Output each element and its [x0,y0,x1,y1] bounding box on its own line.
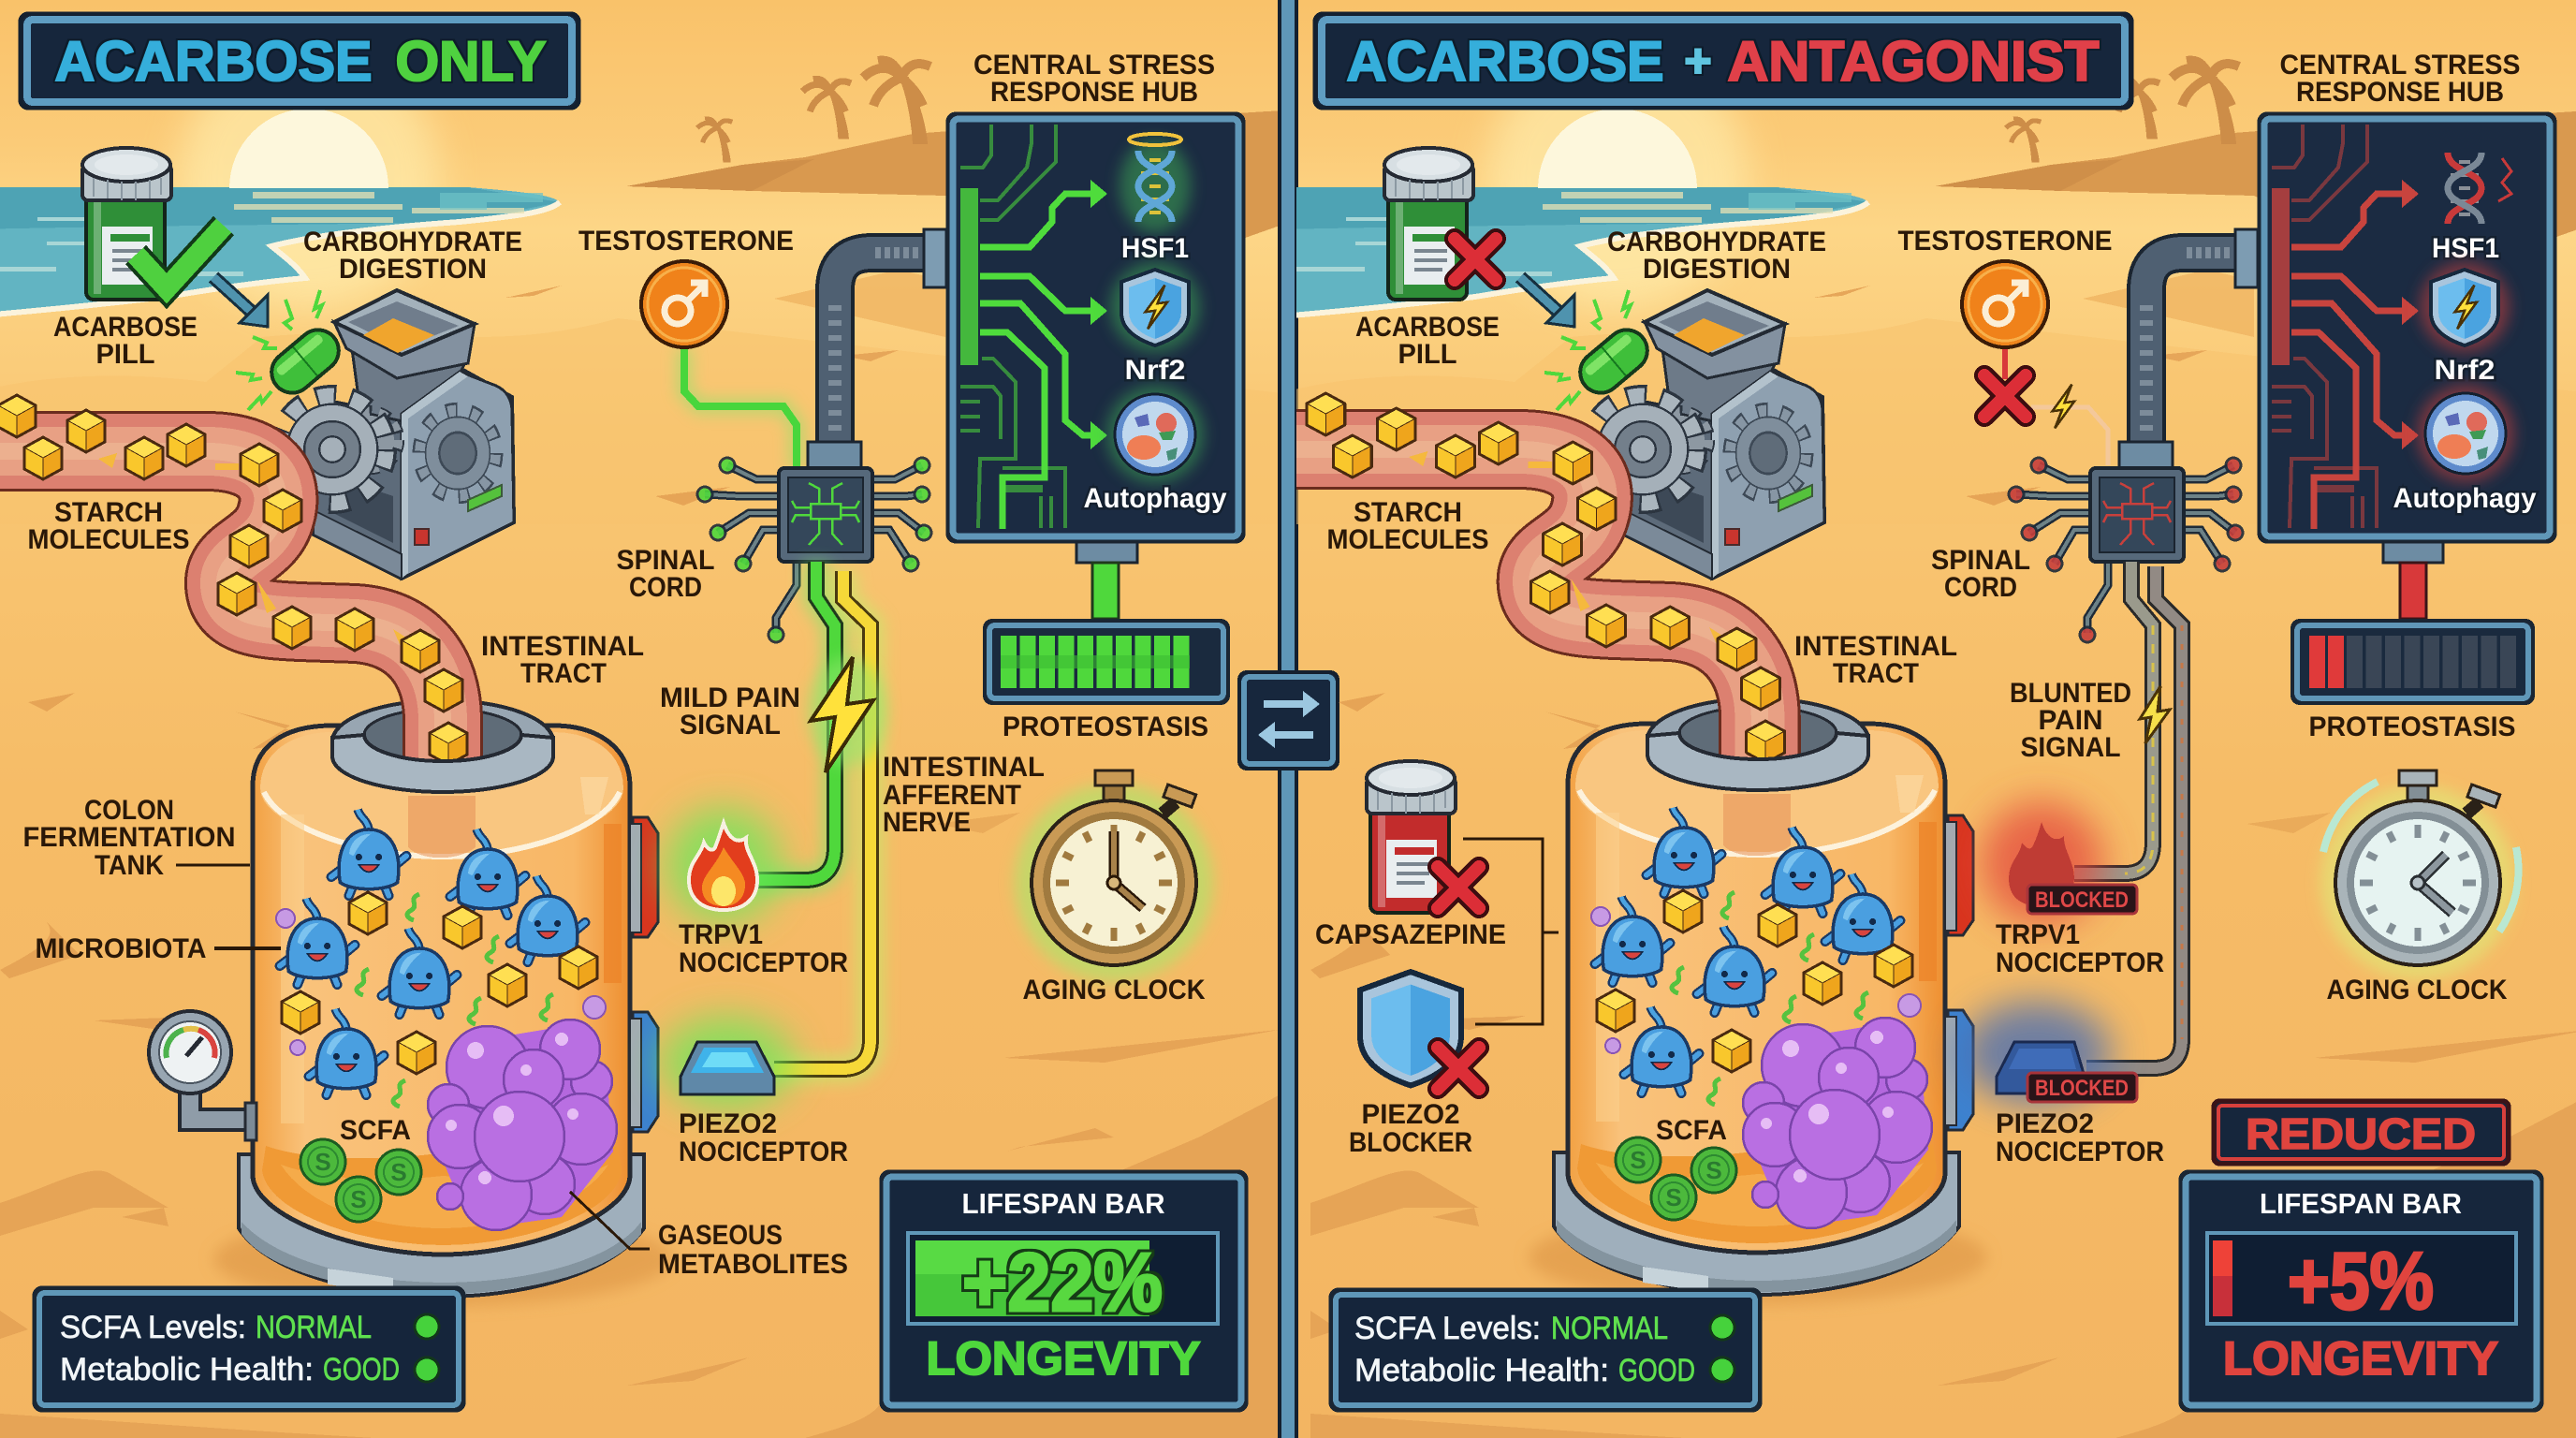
lifespan bar panel: +5% [2288,1237,2434,1327]
label: aging clock: AGING CLOCK [1022,975,1206,1005]
intestinal tract with starch cubes [0,395,467,765]
label: colon fermentation tank: TANK [95,850,164,881]
colon fermentation tank [213,700,672,1306]
status box: Metabolic Health: [1354,1353,1609,1388]
label: spinal cord: SPINAL [616,545,715,576]
label: starch molecules: MOLECULES [28,524,189,555]
lifespan bar panel: LONGEVITY [927,1332,1200,1385]
label: TRPV1 nociceptor: NOCICEPTOR [1996,947,2164,978]
label: aging clock: AGING CLOCK [2327,975,2508,1005]
panel: central stress response hub [948,114,1243,541]
aging clock [1015,770,1213,982]
label: TRPV1 nociceptor: NOCICEPTOR [679,947,848,978]
label: acarbose pill: ACARBOSE [1355,312,1500,343]
label: acarbose pill: PILL [1398,339,1456,370]
icon: testosterone coin [641,261,727,347]
label: HSF1: HSF1 [1121,233,1189,264]
label: testosterone: TESTOSTERONE [578,226,794,257]
label: intestinal tract [481,631,644,689]
label: intestinal tract: INTESTINAL [1794,631,1957,662]
label: gaseous metabolites [570,1192,848,1280]
label: Nrf2: Nrf2 [1125,355,1185,386]
label: acarbose pill [53,312,198,370]
label: autophagy: Autophagy [2393,483,2537,514]
intestinal tract with starch cubes [1280,393,1784,763]
label: spinal cord [616,545,715,603]
label: spinal cord [1931,545,2030,603]
label: blunted pain signal [2010,678,2131,763]
label: starch molecules: STARCH [1354,497,1462,528]
icon: testosterone coin [1962,261,2048,347]
tank ring front [332,735,553,792]
beach scene with sun, sea and palms [0,47,1282,1438]
label: HSF1: HSF1 [2432,233,2499,264]
label: piezo2 blocker: BLOCKER [1349,1127,1472,1158]
label: acarbose pill [1355,312,1500,370]
label: starch molecules [1327,497,1488,555]
SCFA coin letters: S [315,1148,331,1176]
spinal cord chip [697,442,931,642]
SCFA coin letters [1630,1146,1722,1211]
label: proteostasis: PROTEOSTASIS [2308,712,2516,742]
blunted nerve lines [2074,562,2182,1068]
icon: Nrf2 shield [2420,262,2510,352]
acarbose pill bottle with check mark [82,148,224,300]
icon: HSF1 dna damaged [2448,153,2511,224]
colon fermentation tank [1529,698,1987,1304]
icon: blocked PIEZO2 plate [1961,1002,2111,1105]
label: TRPV1 nociceptor: TRPV1 [1996,919,2080,950]
label: central stress response hub [973,50,1215,108]
title banner [1315,14,2131,108]
green connector to proteostasis [1076,542,1137,619]
icon: TRPV1 flame [666,807,782,923]
label: autophagy: Autophagy [1084,483,1227,514]
hub circuitry [960,125,1107,529]
arrow: pill to digestion [213,277,268,327]
lifespan bar panel: LONGEVITY [2223,1332,2498,1385]
SCFA coin letters [315,1148,407,1213]
aging clock [2320,770,2519,980]
label: intestinal afferent nerve: AFFERENT [883,780,1021,811]
label: piezo2 blocker: PIEZO2 [1361,1099,1460,1130]
icon: blocked testosterone line [1984,348,2108,465]
label: carbohydrate digestion: DIGESTION [339,254,487,285]
swap arrows badge [1239,672,1338,769]
label: intestinal tract: TRACT [520,658,607,689]
title banner: ACARBOSE [1346,30,1664,93]
status box [1331,1290,1760,1410]
label: PIEZO2 nociceptor: NOCICEPTOR [679,1137,848,1167]
status box: SCFA Levels: [1354,1311,1541,1346]
label: acarbose pill: ACARBOSE [53,312,198,343]
label: PIEZO2 nociceptor: PIEZO2 [1996,1108,2094,1139]
SCFA coin letters: S [1665,1183,1682,1211]
label: central stress response hub [2280,50,2520,108]
SCFA coin letters: S [1630,1146,1647,1174]
label: PIEZO2 nociceptor: NOCICEPTOR [1996,1137,2164,1167]
center divider [1278,0,1298,1438]
proteostasis gauge [985,621,1228,703]
icon: autophagy cell [1106,386,1204,483]
SCFA coin letters: S [350,1185,367,1213]
status box: SCFA Levels: [60,1310,246,1345]
capsazepine bottle with red X [1367,761,1479,913]
panel: central stress response hub [2260,114,2554,541]
label: carbohydrate digestion [303,227,522,285]
label: central stress response hub: CENTRAL STRESS [2280,50,2520,81]
icon: PIEZO2 plate [660,1016,795,1109]
spinal cord chip [2009,442,2243,642]
acarbose pill bottle with red X [1384,148,1496,300]
icon: small lightning bolt [2140,686,2170,743]
SCFA coin letters: S [390,1158,407,1186]
label: TRPV1 nociceptor [679,919,848,978]
green capsule with sparks [1544,290,1656,410]
icon: Nrf2 shield [1110,262,1200,352]
label: spinal cord: CORD [629,572,702,603]
icon: blocked TRPV1 flame [1980,801,2103,925]
label: acarbose pill: PILL [95,339,155,370]
label: PIEZO2 nociceptor: PIEZO2 [679,1108,777,1139]
label: starch molecules: STARCH [54,497,163,528]
label: central stress response hub: RESPONSE HUB [2296,77,2504,108]
icon: autophagy cell [2417,385,2514,482]
status box: NORMAL [256,1310,372,1345]
hub circuitry [2272,125,2419,529]
label: starch molecules [28,497,189,555]
red connector to proteostasis [2383,542,2443,619]
status box: GOOD [323,1352,400,1387]
label: intestinal afferent nerve: INTESTINAL [883,752,1045,783]
label: carbohydrate digestion: CARBOHYDRATE [1607,227,1826,257]
label: blunted pain signal: SIGNAL [2020,732,2121,763]
tank ring front [1647,733,1868,790]
stress hub pipe [2146,229,2258,445]
label: Nrf2: Nrf2 [2434,355,2496,386]
label: mild pain signal: SIGNAL [680,710,781,741]
status box [35,1288,463,1410]
label: SCFA: SCFA [1656,1115,1727,1146]
arrow: pill to digestion [1520,277,1574,327]
label: carbohydrate digestion: DIGESTION [1643,254,1791,285]
lifespan bar panel: LIFESPAN BAR [962,1187,1164,1220]
title banner: + [1684,35,1712,87]
label: spinal cord: CORD [1944,572,2017,603]
label: blunted pain signal: PAIN [2039,705,2102,736]
lifespan bar panel: +22% [962,1236,1163,1328]
label: carbohydrate digestion: CARBOHYDRATE [303,227,522,257]
lifespan bar panel [882,1172,1246,1410]
label: gaseous metabolites: METABOLITES [658,1249,848,1280]
panel: acarbose plus antagonist [1280,14,2576,1438]
label: piezo2 blocker [1349,1099,1472,1158]
label: colon fermentation tank: COLON [84,795,174,826]
label: spinal cord: SPINAL [1931,545,2030,576]
beach scene with sun, sea and palms [1281,47,2576,1438]
lifespan bar panel [2181,1172,2541,1410]
label: SCFA: SCFA [340,1115,411,1146]
label: proteostasis: PROTEOSTASIS [1003,712,1208,742]
icon: HSF1 dna [1120,134,1191,233]
afferent nerve lines [757,562,871,1069]
label: capsazepine: CAPSAZEPINE [1315,919,1506,950]
lifespan bar panel: LIFESPAN BAR [2260,1187,2462,1220]
label: intestinal afferent nerve [883,752,1045,838]
title banner: ANTAGONIST [1728,30,2099,93]
green capsule with sparks [236,290,347,410]
grinder machine [1591,290,1824,579]
label: central stress response hub: CENTRAL STRESS [973,50,1215,81]
label: colon fermentation tank [22,795,250,881]
green testosterone nerve line [684,348,797,468]
label: intestinal tract [1794,631,1957,689]
label: colon fermentation tank: FERMENTATION [22,822,236,853]
label: blunted pain signal: BLUNTED [2010,678,2131,709]
label: microbiota: MICROBIOTA [36,933,206,964]
blocked badge: BLOCKED [2035,1076,2129,1101]
pressure gauge [149,1011,256,1140]
label: gaseous metabolites: GASEOUS [658,1220,783,1251]
proteostasis gauge [2292,621,2533,703]
status box: Metabolic Health: [60,1352,314,1387]
blocked badge: BLOCKED [2035,888,2129,913]
title banner: ACARBOSE [54,30,373,93]
label: PIEZO2 nociceptor [1996,1108,2164,1167]
title banner: ONLY [395,30,547,93]
label: intestinal tract: TRACT [1833,658,1919,689]
label: starch molecules: MOLECULES [1327,524,1488,555]
status box: GOOD [1618,1353,1695,1388]
icon: lightning bolt [808,657,886,772]
reduced badge: REDUCED [2246,1109,2476,1158]
SCFA coin letters: S [1705,1156,1722,1184]
bracket from blockers to tank [1463,839,1559,1024]
reduced badge [2214,1101,2509,1164]
title banner [21,14,578,108]
stress hub pipe [835,229,946,445]
label: mild pain signal: MILD PAIN [660,682,800,713]
panel: acarbose only [0,14,1282,1438]
status box: NORMAL [1551,1311,1668,1346]
label: central stress response hub: RESPONSE HUB [990,77,1198,108]
label: TRPV1 nociceptor [1996,919,2164,978]
label: PIEZO2 nociceptor [679,1108,848,1167]
label: TRPV1 nociceptor: TRPV1 [679,919,763,950]
label: testosterone: TESTOSTERONE [1898,226,2112,257]
piezo2 blocker shield with red X [1360,972,1479,1089]
label: carbohydrate digestion [1607,227,1826,285]
label: mild pain signal [660,682,800,741]
label: intestinal tract: INTESTINAL [481,631,644,662]
grinder machine [281,290,514,579]
label: intestinal afferent nerve: NERVE [883,807,971,838]
